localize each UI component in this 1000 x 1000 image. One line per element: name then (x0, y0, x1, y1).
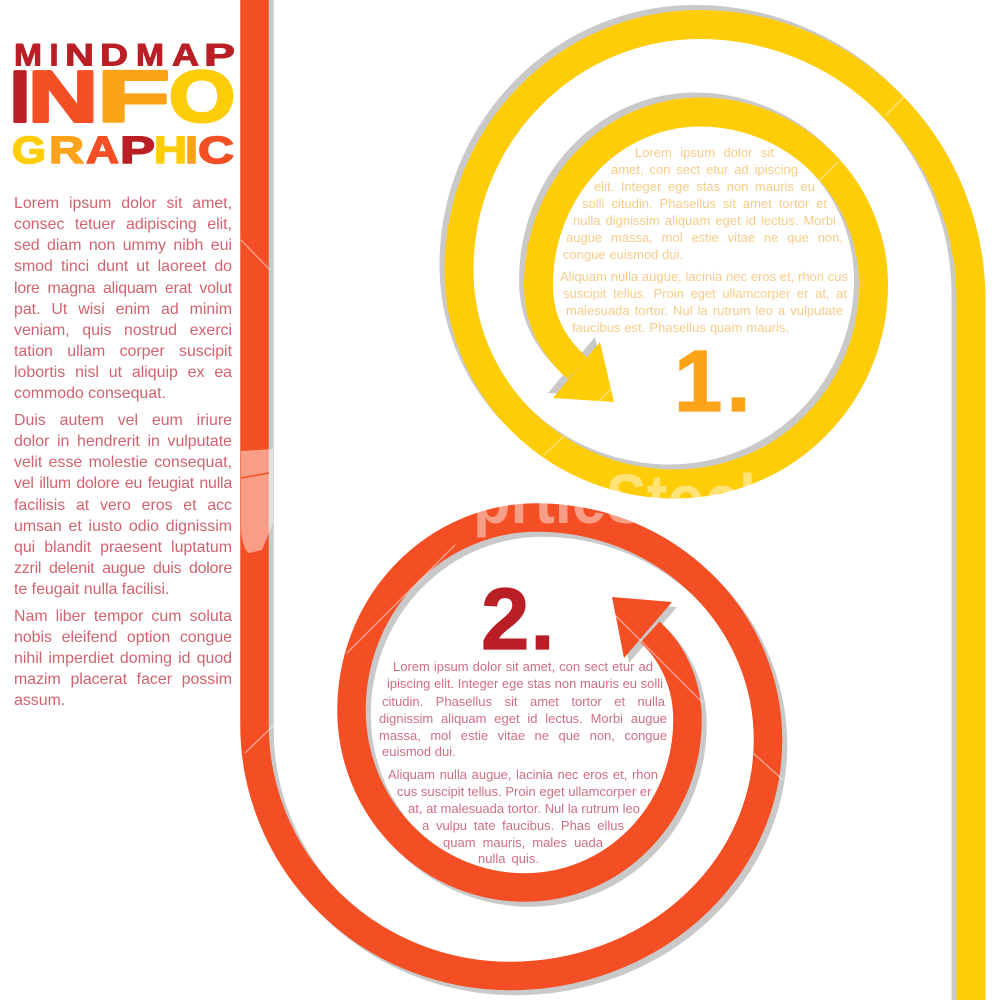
circle text 2: at, at malesuada tortor. Nul la rutrum leo (408, 800, 640, 816)
number 1: 1. (674, 333, 755, 430)
left text column: nihil imperdiet doming id quod (14, 650, 232, 667)
left text column: mazim placerat facer possim (14, 671, 232, 688)
title word: GRAPHIC: I (185, 130, 198, 172)
circle text 2: Lorem ipsum dolor sit amet, con sect etur ad (393, 659, 653, 674)
left text column: dolor in hendrerit in vulputate (14, 433, 232, 450)
title word: GRAPHIC (12, 130, 234, 172)
title word: MINDMAP: N (65, 36, 94, 72)
left text column: nobis eleifend option congue (14, 629, 232, 646)
left text column: consec tetuer adipiscing elit, (14, 216, 232, 233)
title word: GRAPHIC: A (86, 130, 119, 172)
circle text 1: amet, con sect etur ad ipiscing (611, 162, 798, 177)
left text column: pat. Ut wisi enim ad minim (14, 301, 232, 318)
left text column: tation ullam corper suscipit (14, 343, 232, 360)
circle text 1: faucibus est. Phasellus quam mauris. (572, 320, 789, 334)
yellow spiral arrow (454, 20, 971, 1000)
number 2: 2. (481, 571, 556, 668)
title word: MINDMAP: M (14, 36, 42, 72)
left text column: facilisis at vero eros et acc (14, 497, 232, 514)
left text column: assum. (14, 692, 65, 709)
left text column: qui blandit praesent luptatum (14, 539, 232, 556)
circle text 1: elit. Integer ege stas non mauris eu (594, 179, 815, 194)
left text column: Lorem ipsum dolor sit amet, (14, 195, 232, 212)
red arrowhead (612, 597, 672, 658)
left text column: lobortis nisl ut aliquip ex ea (14, 364, 232, 381)
circle text 1: Aliquam nulla augue, lacinia nec eros et, rhon cus (560, 269, 848, 284)
circle text 2: citudin. Phasellus sit amet tortor et nulla (382, 694, 665, 708)
title word: MINDMAP: I (50, 36, 58, 72)
title word: MINDMAP: A (172, 36, 199, 72)
left text column: commodo consequat. (14, 385, 166, 402)
circle text 1: solli citudin. Phasellus sit amet tortor et (582, 196, 827, 211)
title word: MINDMAP: M (136, 36, 164, 72)
left text column: te feugait nulla facilisi. (14, 581, 169, 598)
circle text 2: Aliquam nulla augue, lacinia nec eros et, rhon (388, 767, 658, 782)
title word: INFO: N (28, 56, 98, 138)
circle text 2: dignissim aliquam eget id lectus. Morbi augue (379, 710, 667, 726)
title word: INFO: I (10, 56, 30, 138)
circle text 2: massa, mol estie vitae ne que non, congue (379, 728, 667, 742)
yellow arrowhead (553, 342, 614, 402)
circle text 1: malesuada tortor. Nul la rutrum leo a vulputate (566, 303, 843, 318)
circle text 2: euismod dui. (382, 744, 456, 759)
left text column: Nam liber tempor cum soluta (14, 608, 232, 625)
circle text 2: nulla quis. (478, 851, 539, 866)
title word: GRAPHIC: P (120, 130, 155, 172)
faint watermark: prtieStock (473, 460, 773, 538)
left text column: lore magna aliquam erat volut (14, 280, 232, 297)
title word: INFO: O (169, 56, 235, 138)
title word: MINDMAP (14, 36, 235, 72)
title word: INFO: F (97, 56, 170, 138)
title word: GRAPHIC: C (198, 130, 234, 172)
left text column: vel illum dolore eu feugiat nulla (14, 475, 232, 492)
circle text 1: suscipit tellus. Proin eget ullamcorper er at, at (563, 286, 847, 301)
faint watermark (241, 449, 773, 553)
circle text 2: cus suscipit tellus. Proin eget ullamcorper er (397, 784, 651, 798)
red spiral arrow (254, 0, 773, 981)
title word: MINDMAP: D (100, 36, 128, 72)
left text column: umsan et iusto odio dignissim (14, 518, 232, 535)
circle text 1: augue massa, mol estie vitae ne que non, (566, 230, 843, 245)
left text column: velit esse molestie consequat, (14, 454, 232, 471)
left text column: Duis autem vel eum iriure (14, 412, 232, 429)
title word: GRAPHIC: H (154, 130, 187, 172)
title word: MINDMAP: P (204, 36, 235, 72)
circle text 1: congue euismod dui. (563, 247, 683, 262)
left text column: zzril delenit augue duis dolore (14, 560, 232, 577)
title: mindmap infographic (10, 36, 235, 172)
left text column: sed diam non ummy nibh eui (14, 237, 232, 254)
circle text 2: a vulpu tate faucibus. Phas ellus (422, 818, 624, 832)
circle text 2: quam mauris, males uada (443, 834, 603, 850)
left text column: smod tinci dunt ut laoreet do (14, 258, 232, 275)
title word: GRAPHIC: G (12, 130, 46, 172)
title word: GRAPHIC: R (49, 130, 84, 172)
circle text 1: nulla dignissim aliquam eget id lectus. Morbi (573, 213, 836, 228)
circle text 2: ipiscing elit. Integer ege stas non mauris eu solli (387, 676, 663, 691)
circle text 1: Lorem ipsum dolor sit (635, 145, 774, 160)
left text column: veniam, quis nostrud exerci (14, 322, 232, 339)
title word: INFO (10, 56, 235, 138)
